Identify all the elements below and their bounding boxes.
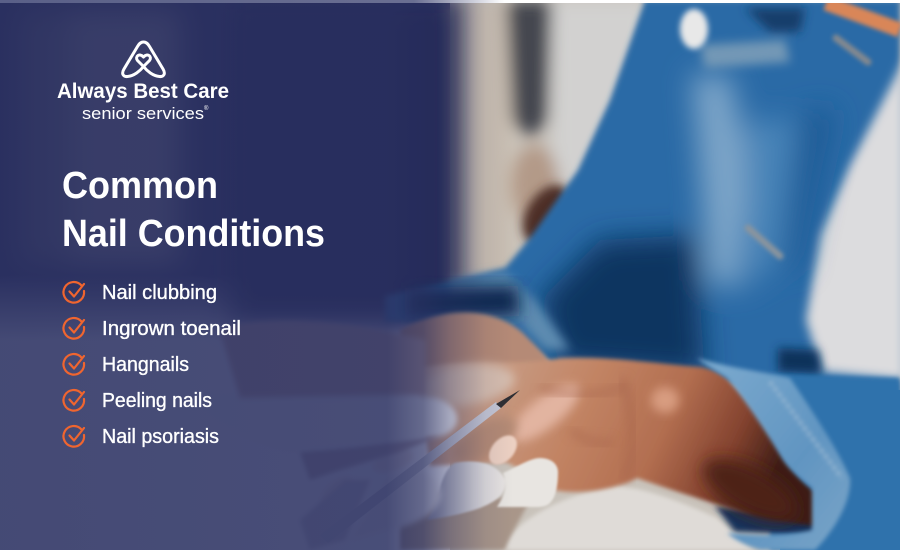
icon: logo triangle with heart [123,42,164,77]
item: Peeling nails: Peeling nails [102,390,212,412]
logo: Always Best Care [57,42,229,123]
blurred left background under overlay [20,0,450,320]
title [62,165,325,255]
jacket shading and seams [540,75,835,375]
item: Nail clubbing: Nail clubbing [102,282,217,304]
registered mark: ® [204,105,209,112]
blurred room background [440,0,647,300]
nail tool [320,390,520,543]
patient fingernail [483,430,523,470]
blanket [400,486,755,550]
left base tones [0,0,450,550]
denim jacket [385,0,900,400]
logo wordmark: Always Best Care [57,80,229,103]
lower jacket sleeve [770,374,900,550]
jacket button [680,9,708,49]
hand creases and highlights [413,358,806,534]
hand and wrist [400,313,816,526]
item: Nail psoriasis: Nail psoriasis [102,426,219,448]
item: Ingrown toenail: Ingrown toenail [102,318,241,340]
top edge strip [0,0,900,3]
dark shadow under wrist [715,506,815,535]
cotton rolls [427,458,558,520]
title: Common [62,165,218,207]
logo tagline: senior services [82,104,204,123]
title: Nail Conditions [62,213,325,255]
glove-side fingernails [300,436,440,550]
item: Hangnails: Hangnails [102,354,189,376]
sleeve cuff [697,358,850,550]
item: Hangnails [63,354,189,376]
checklist of nail conditions [63,282,241,448]
white shirt [806,58,900,380]
gloved fingers [200,321,457,540]
